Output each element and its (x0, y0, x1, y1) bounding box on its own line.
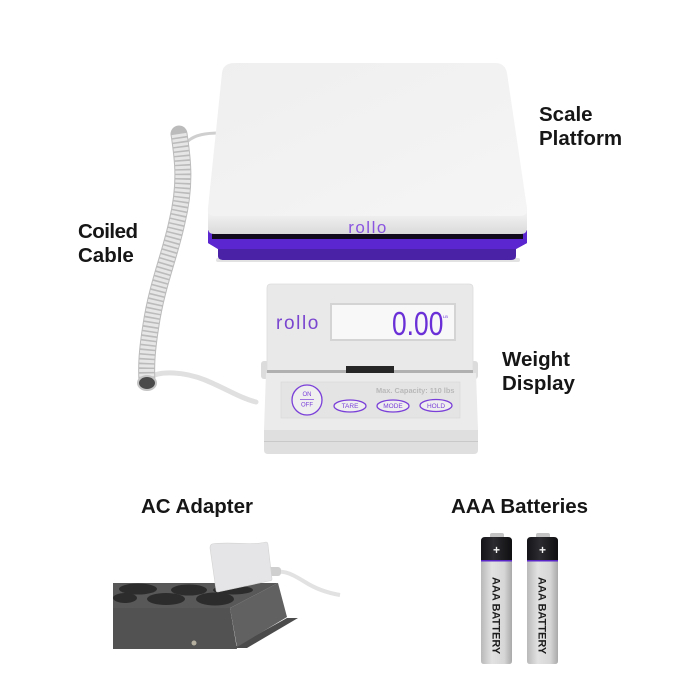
purple base (208, 230, 527, 260)
strip front (113, 608, 237, 649)
strip right side (230, 583, 287, 647)
battery 1: AAA BATTERY (490, 577, 502, 655)
on off button: OFF (301, 402, 313, 408)
strip flange (233, 618, 298, 648)
screw (192, 640, 196, 646)
unit: LB (443, 314, 448, 319)
label: scale platform: Scale (539, 103, 593, 126)
LCD screen (330, 303, 456, 341)
rollo logo: rollo (276, 313, 320, 334)
on off button (292, 385, 322, 415)
on off button: ON (302, 392, 312, 398)
adapter body (210, 542, 272, 592)
battery 1 (481, 533, 512, 664)
base front (264, 430, 478, 454)
AC adapter plugged into power strip (113, 542, 340, 649)
adapter cable (270, 571, 340, 595)
hinge slot (346, 366, 394, 373)
soft shadow (216, 258, 520, 262)
top surface (208, 63, 527, 216)
label: scale platform: Platform (539, 127, 622, 150)
label: AAA batteries: AAA Batteries (451, 495, 588, 518)
battery 1: + (493, 543, 500, 557)
battery 2: AAA BATTERY (536, 577, 548, 655)
label: weight display: Display (502, 372, 576, 395)
lip (208, 210, 527, 234)
strip top (113, 583, 278, 608)
control panel (281, 382, 460, 418)
tare button: TARE (342, 403, 359, 410)
cable strain relief (266, 567, 281, 576)
outlets (113, 584, 253, 606)
label: AC adapter: AC Adapter (141, 495, 253, 518)
AAA batteries (481, 533, 558, 664)
black gap (212, 232, 523, 239)
weight reading: 0.00 (392, 306, 443, 343)
hold button (420, 400, 452, 412)
base top (264, 373, 478, 430)
coiled cable (138, 133, 256, 402)
label: weight display: Weight (502, 348, 570, 371)
side hinges (261, 361, 269, 379)
mode button (377, 400, 409, 412)
hold button: HOLD (427, 403, 445, 410)
capacity text: Max. Capacity: 110 lbs (376, 386, 454, 395)
battery 2 (527, 533, 558, 664)
mode button: MODE (383, 403, 403, 410)
tare button (334, 400, 366, 412)
scale platform (208, 63, 527, 262)
rollo logo: rollo (348, 218, 388, 237)
label: coiled cable: Coiled (78, 220, 138, 243)
display back panel (267, 284, 473, 372)
battery 2: + (539, 543, 546, 557)
weight display (261, 284, 478, 454)
label: coiled cable second line: Cable (78, 244, 134, 267)
